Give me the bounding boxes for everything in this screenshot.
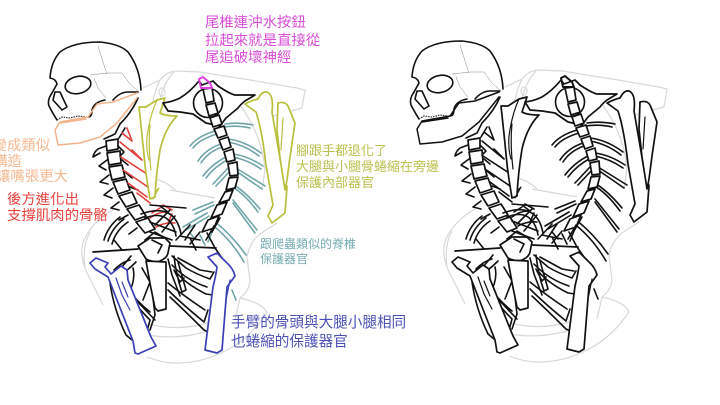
sternum and shoulder [138,232,180,311]
label: legs degenerated [296,143,439,190]
label: legs degenerated: 腳跟手都退化了 [296,143,387,158]
label: legs degenerated: 大腿與小腿骨蜷縮在旁邊 [296,159,439,174]
jaw highlighted orange [55,93,137,145]
label: jaw [0,137,68,185]
label: reptile-like spine: 保護器官 [260,251,308,266]
label: arm bones: 也蜷縮的保護器官 [231,333,348,350]
panel: annotated colour skeleton toilet [48,42,305,363]
rear leg bone highlighted yellow (left) [139,98,177,199]
neck and cervical vertebrae [93,124,155,234]
pelvis [163,81,255,126]
label: reptile-like spine: 跟爬蟲類似的脊椎 [260,236,356,251]
arm bone highlighted blue (left) [90,258,156,354]
panel: plain black skeleton toilet [410,41,667,362]
toilet outline (grey) [82,71,305,363]
label: rear support bones [7,191,108,224]
label: rear support bones: 後方進化出 [7,191,79,208]
label: rear support bones: 支撐肌肉的骨骼 [7,207,108,224]
ribs highlighted teal [183,123,265,300]
label: arm bones: 手臂的骨頭與大腿小腿相同 [231,314,406,331]
label: tailbone flush button: 尾椎連沖水按鈕 [205,14,306,31]
label: tailbone flush button: 尾追破壞神經 [205,49,291,66]
label: legs degenerated: 保護內部器官 [296,175,374,190]
label: tailbone flush button [205,14,320,66]
tail spine [202,88,238,240]
label: tailbone flush button: 拉起來就是直接從 [205,32,320,49]
label: arm bones [231,314,406,350]
lower rib cage [93,205,222,340]
label: reptile-like spine [260,236,356,266]
arm bone highlighted blue (right) [205,253,235,353]
skull [48,42,141,145]
ribs highlighted red [120,128,175,227]
tailbone highlighted pink [199,77,212,88]
rear leg bone highlighted yellow (right) [245,92,295,223]
